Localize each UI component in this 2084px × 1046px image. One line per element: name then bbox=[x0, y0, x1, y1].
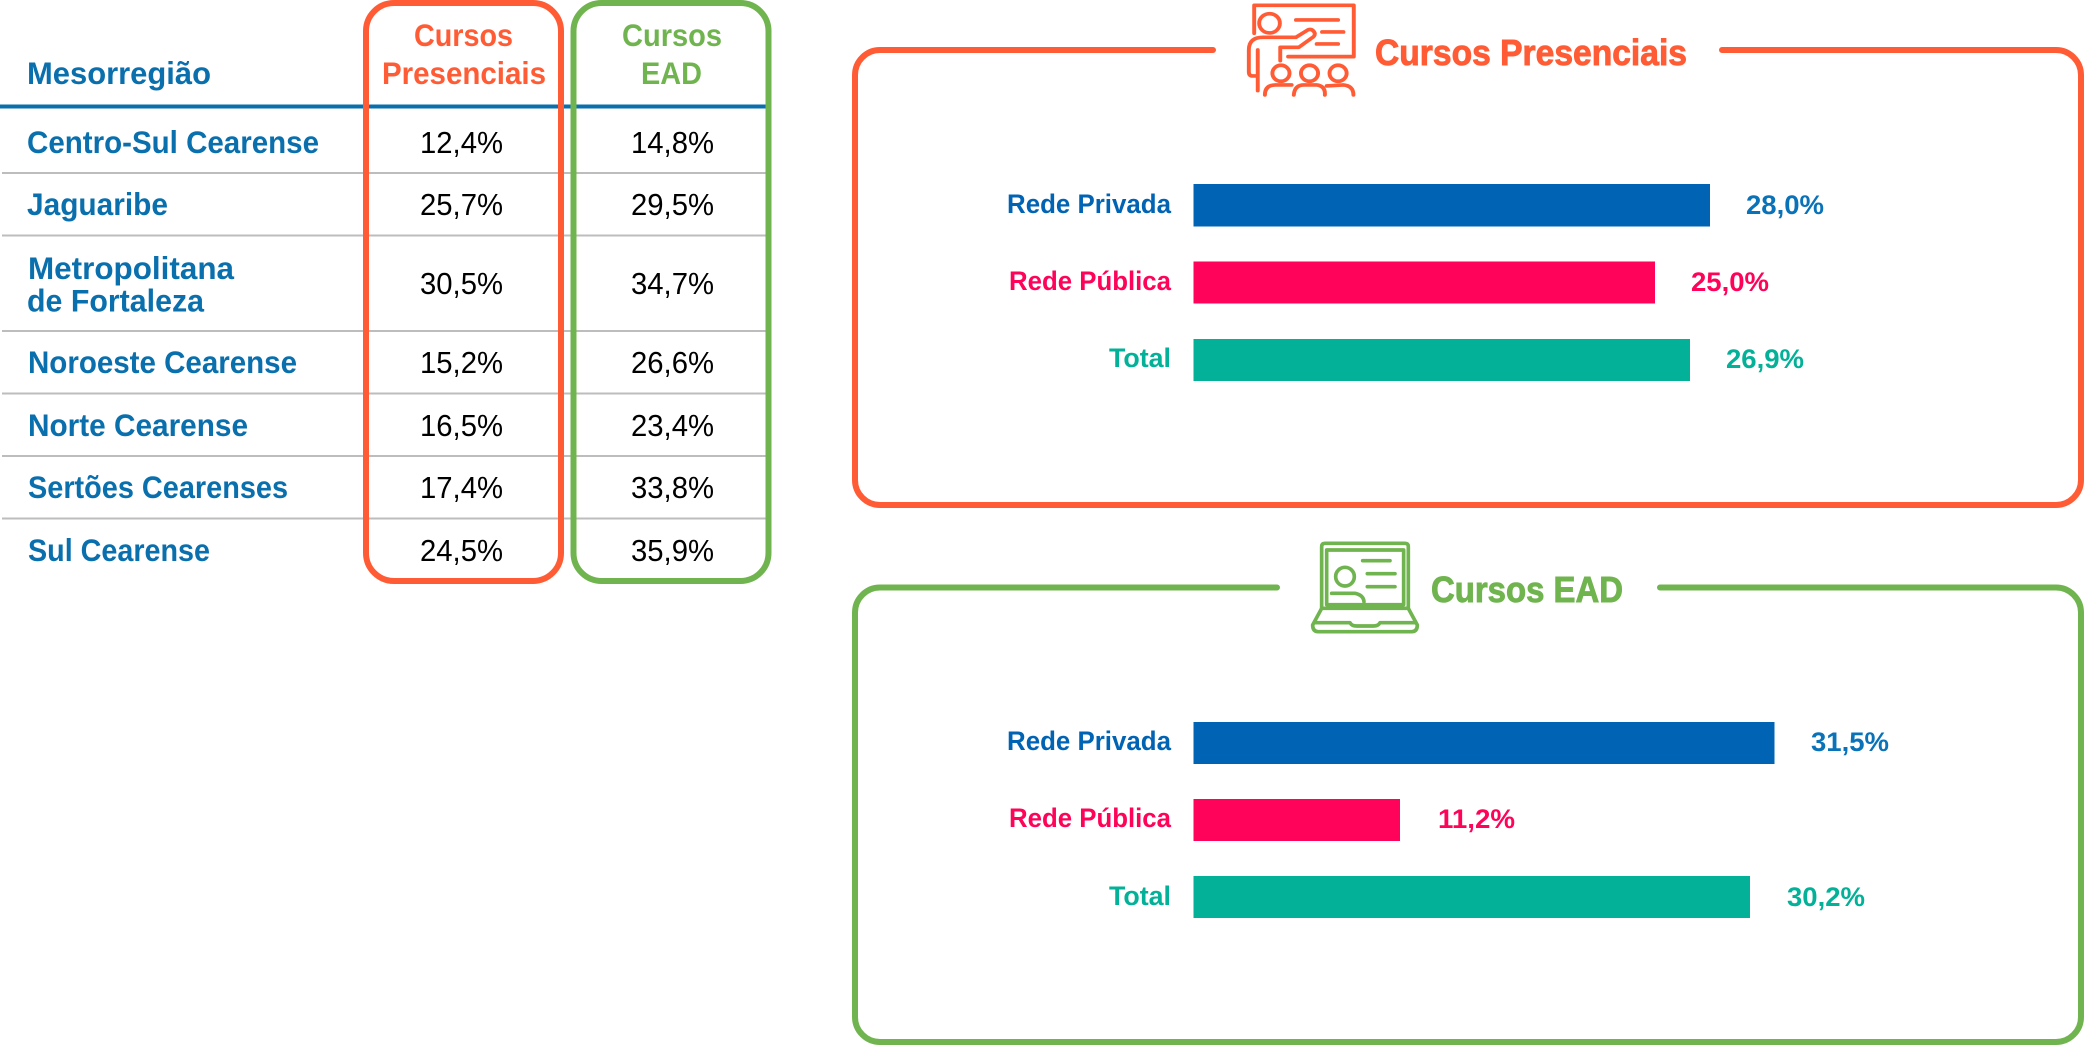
bar: rede privada: Rede Privada bbox=[1007, 726, 1171, 756]
table: mesorregião bbox=[0, 3, 768, 581]
row: Metropolitana de Fortaleza: 34,7% bbox=[631, 266, 714, 301]
row: Centro-Sul Cearense: 12,4% bbox=[420, 125, 503, 160]
row: Centro-Sul Cearense: Centro-Sul Cearense bbox=[27, 124, 319, 160]
row: Centro-Sul Cearense bbox=[27, 124, 714, 160]
row: Noroeste Cearense: 15,2% bbox=[420, 345, 503, 380]
table row dividers bbox=[2, 173, 767, 518]
bar: total: Total bbox=[1109, 343, 1171, 373]
row: Sertões Cearenses: 17,4% bbox=[420, 470, 503, 505]
row: Sertões Cearenses: 33,8% bbox=[631, 470, 714, 505]
bar: total bbox=[1109, 876, 1865, 918]
row: Jaguaribe: 25,7% bbox=[420, 187, 503, 222]
row: Norte Cearense: 16,5% bbox=[420, 408, 503, 443]
row: Jaguaribe bbox=[27, 186, 714, 222]
bar: total: 30,2% bbox=[1787, 882, 1865, 912]
row: Noroeste Cearense: 26,6% bbox=[631, 345, 714, 380]
bar: rede pública: 11,2% bbox=[1438, 804, 1515, 834]
row: Jaguaribe: Jaguaribe bbox=[27, 186, 168, 222]
bar: rede pública bbox=[1009, 799, 1515, 841]
row: Metropolitana de Fortaleza: Metropolitana bbox=[28, 250, 234, 286]
column heading: cursos presenciais: Presenciais bbox=[382, 55, 546, 91]
bar: rede pública bbox=[1009, 262, 1769, 304]
table header line bbox=[0, 104, 767, 108]
bar: rede privada: 28,0% bbox=[1746, 190, 1824, 220]
row: Sul Cearense: 24,5% bbox=[420, 533, 503, 568]
row: Metropolitana de Fortaleza bbox=[27, 250, 714, 318]
row: Jaguaribe: 29,5% bbox=[631, 187, 714, 222]
row: Norte Cearense: 23,4% bbox=[631, 408, 714, 443]
row: Noroeste Cearense: Noroeste Cearense bbox=[28, 344, 297, 380]
row: Sul Cearense: Sul Cearense bbox=[28, 532, 210, 568]
row: Sul Cearense: 35,9% bbox=[631, 533, 714, 568]
column heading: cursos EAD: Cursos bbox=[622, 17, 722, 53]
bar: rede pública: Rede Pública bbox=[1009, 266, 1171, 296]
icon: presenter with audience bbox=[1249, 5, 1354, 95]
icon: laptop with profile bbox=[1313, 543, 1417, 632]
row: Metropolitana de Fortaleza: 30,5% bbox=[420, 266, 503, 301]
panel title: Cursos Presenciais bbox=[1375, 32, 1687, 73]
row: Sertões Cearenses bbox=[28, 469, 714, 505]
row: Norte Cearense bbox=[28, 407, 714, 443]
bar: rede pública: Rede Pública bbox=[1009, 803, 1171, 833]
bar: rede privada bbox=[1007, 722, 1889, 764]
bar: total: Total bbox=[1109, 881, 1171, 911]
row: Norte Cearense: Norte Cearense bbox=[28, 407, 248, 443]
bar: rede privada: 31,5% bbox=[1811, 727, 1889, 757]
panel: cursos EAD bbox=[855, 543, 2081, 1042]
highlight box: cursos presenciais bbox=[366, 3, 561, 581]
bar: rede pública: 25,0% bbox=[1691, 267, 1769, 297]
row: Sul Cearense bbox=[28, 532, 714, 568]
column heading: cursos presenciais: Cursos bbox=[414, 17, 513, 53]
bar: rede privada: Rede Privada bbox=[1007, 189, 1171, 219]
row: Sertões Cearenses: Sertões Cearenses bbox=[28, 469, 288, 505]
row: Metropolitana de Fortaleza: de Fortaleza bbox=[27, 282, 204, 318]
panel: cursos presenciais bbox=[855, 5, 2081, 505]
bar: rede privada bbox=[1007, 184, 1824, 226]
panel title: Cursos EAD bbox=[1431, 569, 1623, 610]
row: Centro-Sul Cearense: 14,8% bbox=[631, 125, 714, 160]
bar: total: 26,9% bbox=[1726, 344, 1804, 374]
row: Noroeste Cearense bbox=[28, 344, 714, 380]
column heading: mesorregião: Mesorregião bbox=[27, 55, 211, 91]
column heading: cursos EAD: EAD bbox=[641, 55, 702, 91]
panel frame bbox=[855, 588, 2081, 1042]
highlight box: cursos EAD bbox=[574, 3, 768, 581]
panel frame bbox=[855, 50, 2081, 505]
bar: total bbox=[1109, 339, 1804, 381]
